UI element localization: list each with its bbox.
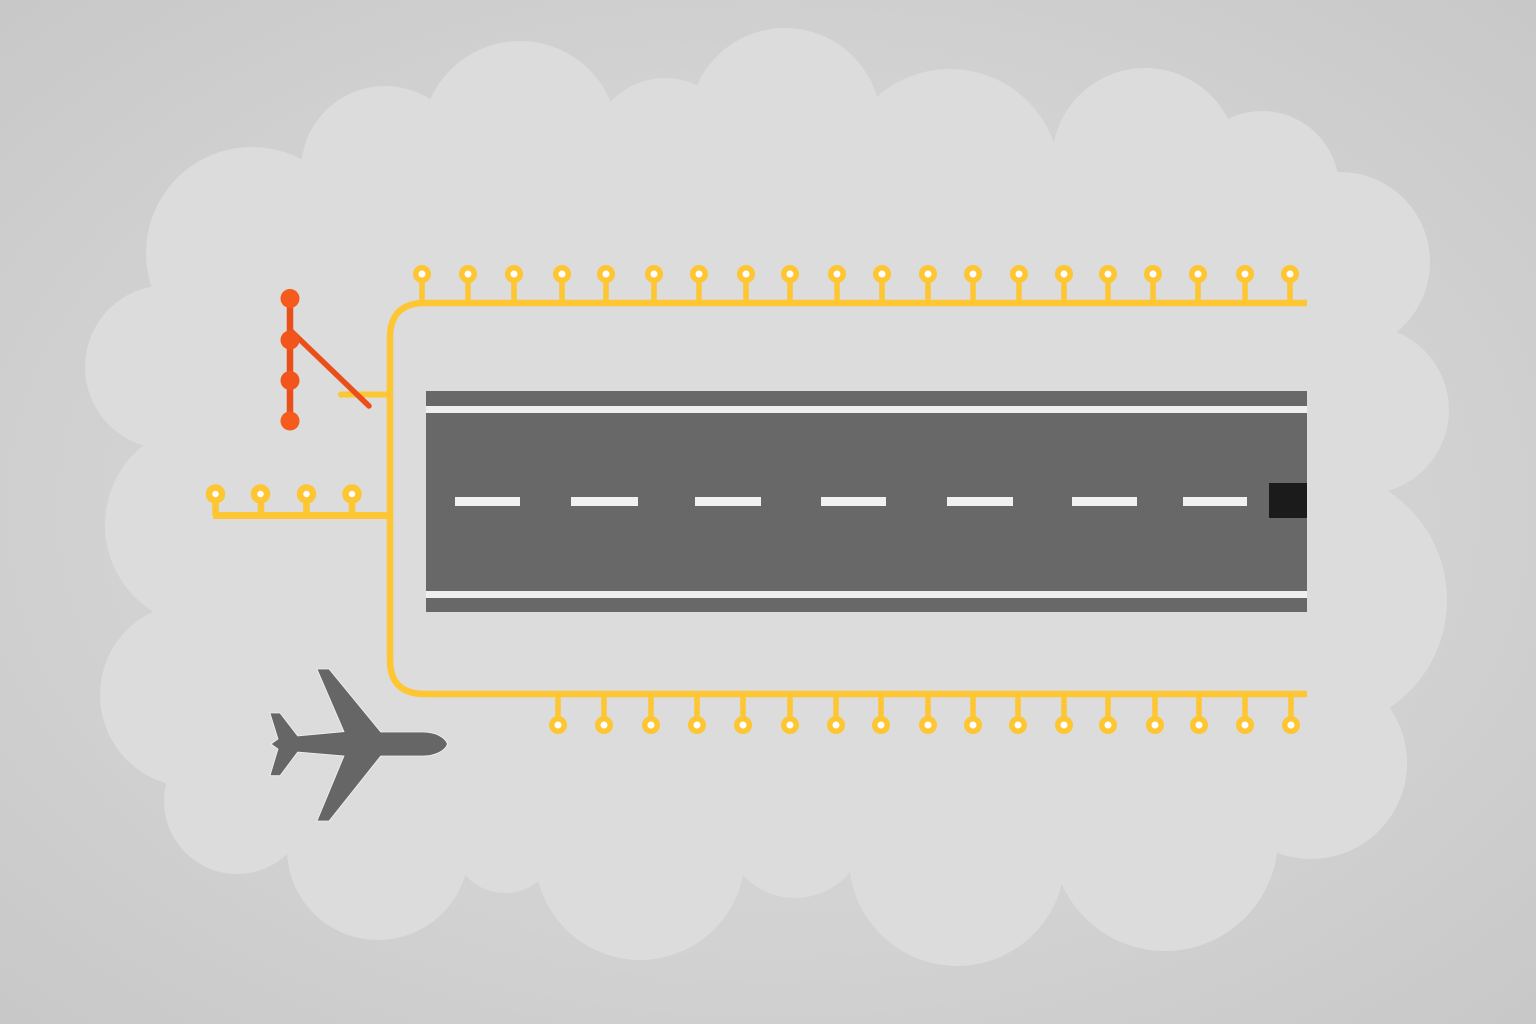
- bottom lights: [552, 694, 1297, 731]
- bottom edge line: [426, 591, 1307, 598]
- runway end block: [1269, 483, 1307, 518]
- centreline dashes: [455, 497, 1247, 506]
- left branch lights: [209, 488, 390, 516]
- top lights: [416, 268, 1296, 303]
- top edge line: [426, 406, 1307, 413]
- connector stub: [341, 392, 390, 398]
- taxiway line: [390, 303, 1307, 694]
- icon: airplane: [270, 669, 448, 821]
- yellow taxiway loop with lights: [209, 268, 1307, 731]
- runway: [426, 391, 1307, 612]
- orange route: [280, 289, 369, 430]
